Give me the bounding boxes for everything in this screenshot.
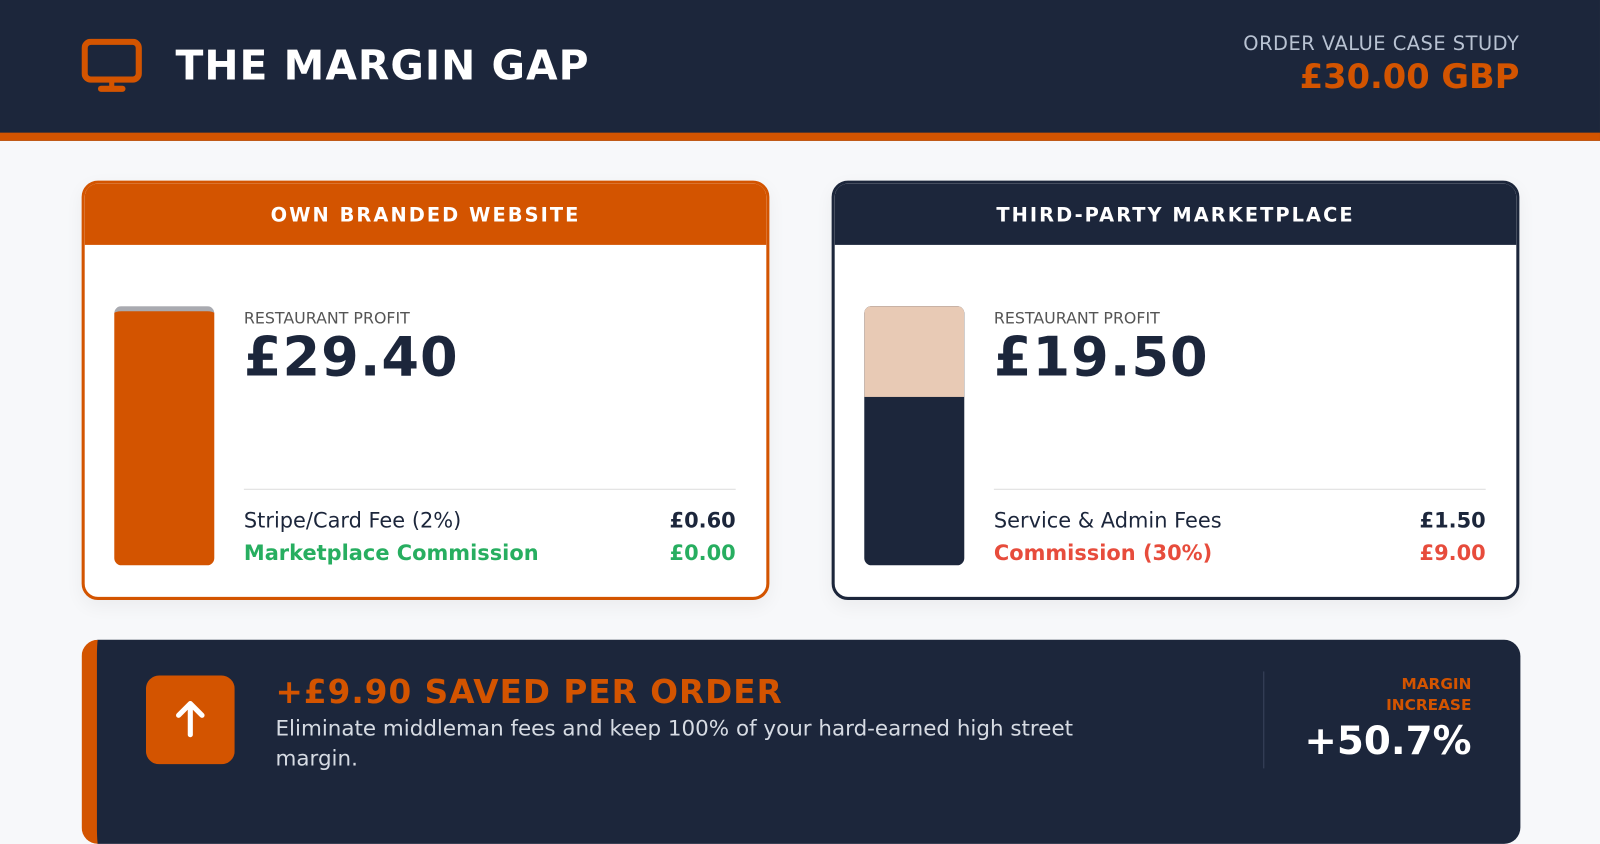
icon: up arrow bbox=[146, 676, 235, 764]
fee rows: Marketplace Commission bbox=[244, 541, 539, 565]
title: THE MARGIN GAP bbox=[176, 43, 590, 90]
banner: savings bbox=[82, 640, 1520, 844]
profit figure: £29.40 bbox=[244, 327, 459, 389]
fee rows: £0.60 bbox=[670, 508, 736, 533]
fee rows: £1.50 bbox=[1420, 508, 1486, 533]
fee rows: Service & Admin Fees bbox=[994, 508, 1222, 533]
margin increase stat bbox=[1304, 674, 1471, 763]
margin increase stat: +50.7% bbox=[1304, 718, 1471, 763]
header bar bbox=[0, 0, 1600, 141]
profit figure: RESTAURANT PROFIT bbox=[244, 309, 410, 328]
fee rows: Stripe/Card Fee (2%) bbox=[244, 508, 461, 533]
fee rows bbox=[244, 489, 736, 565]
margin increase stat: INCREASE bbox=[1386, 696, 1471, 714]
panel: third-party marketplace bbox=[832, 181, 1519, 600]
case study label: ORDER VALUE CASE STUDY bbox=[1243, 33, 1519, 55]
fee rows bbox=[994, 489, 1486, 565]
stacked bar bbox=[864, 306, 964, 565]
profit figure: RESTAURANT PROFIT bbox=[994, 309, 1160, 328]
panel heading: THIRD-PARTY MARKETPLACE bbox=[996, 204, 1355, 227]
bar bbox=[114, 306, 214, 565]
profit figure: £19.50 bbox=[994, 327, 1209, 389]
fee rows: Commission (30%) bbox=[994, 541, 1212, 565]
panel heading bbox=[85, 184, 766, 245]
savings heading: +£9.90 SAVED PER ORDER bbox=[276, 672, 783, 711]
panel heading: OWN BRANDED WEBSITE bbox=[271, 204, 580, 227]
fee rows: £0.00 bbox=[670, 541, 736, 565]
margin increase stat: MARGIN bbox=[1401, 674, 1471, 693]
icon: monitor bbox=[82, 38, 142, 92]
panel: own branded website bbox=[82, 181, 769, 600]
panel heading bbox=[835, 184, 1516, 245]
case study label bbox=[1243, 33, 1519, 96]
savings text: Eliminate middleman fees and keep 100% of your hard-earned high street margin. bbox=[276, 716, 1073, 770]
fee rows: £9.00 bbox=[1420, 541, 1486, 565]
case study label: £30.00 GBP bbox=[1300, 56, 1519, 96]
